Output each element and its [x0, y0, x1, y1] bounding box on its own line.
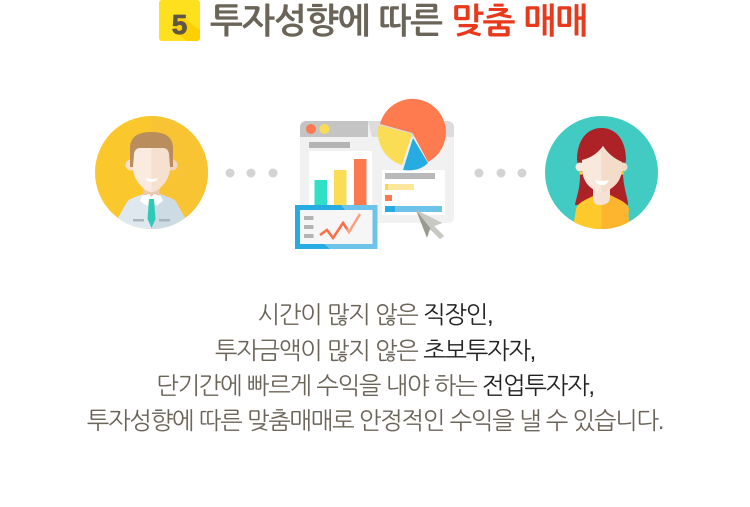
icon: number 5 badge	[159, 0, 200, 41]
body text	[87, 302, 663, 435]
icon: number 5 badge: 5	[172, 9, 187, 40]
heading	[159, 0, 587, 41]
dots: right connector	[474, 168, 526, 178]
heading text: 투자성향에 따른 맞춤 매매	[210, 2, 587, 41]
text line 4: 투자성향에 따른 맞춤매매로 안정적인 수익을 낼 수 있습니다.	[87, 408, 663, 435]
icon: analytics dashboard	[295, 99, 454, 249]
icon: woman avatar	[545, 116, 658, 229]
text line 2: 투자금액이 많지 않은 초보투자자,	[215, 338, 535, 365]
text line 1: 시간이 많지 않은 직장인,	[258, 302, 492, 329]
icon: man avatar	[95, 116, 208, 229]
text line 3: 단기간에 빠르게 수익을 내야 하는 전업투자자,	[156, 373, 594, 400]
illustration row	[95, 98, 658, 249]
dots: left connector	[226, 168, 278, 178]
